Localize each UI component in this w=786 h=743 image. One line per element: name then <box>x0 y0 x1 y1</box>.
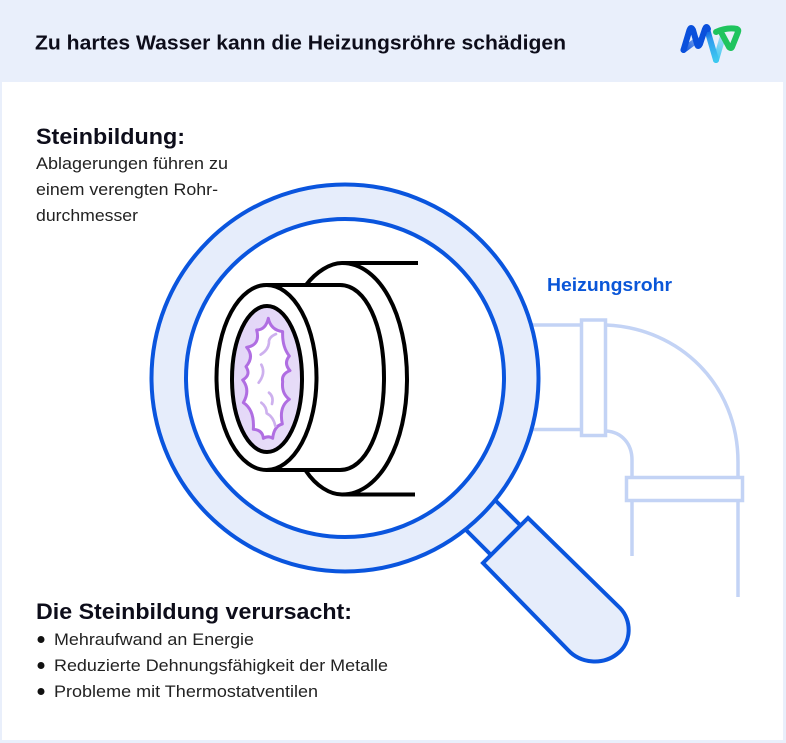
bullet list: Mehraufwand an Energie <box>54 630 254 649</box>
magnifier rim <box>152 184 538 572</box>
bullet list: Reduzierte Dehnungsfähigkeit der Metalle <box>54 656 388 675</box>
heading: Die Steinbildung verursacht: Die Steinbildung verursacht: <box>36 599 352 624</box>
heating pipe illustration <box>525 320 742 597</box>
magnifier neck <box>460 495 522 556</box>
text block: Steinbildung description: durchmesser <box>36 206 138 225</box>
text block: Steinbildung description: einem verengten Rohr- <box>36 180 218 199</box>
icon: logo <box>684 27 738 60</box>
pipe body <box>266 285 384 470</box>
magnifier lens <box>186 219 504 537</box>
bullet list: Probleme mit Thermostatventilen <box>54 682 318 701</box>
title: Zu hartes Wasser kann die Heizungsröhre schädigen <box>35 32 566 54</box>
scale outline <box>243 318 290 438</box>
limescale deposits <box>243 318 290 438</box>
bullet list <box>38 630 388 701</box>
pipe opening <box>232 306 302 452</box>
pipe front ring <box>216 285 316 470</box>
magnifying glass <box>152 184 629 661</box>
text block: Steinbildung description <box>36 154 228 225</box>
text block: Steinbildung description: Ablagerungen führen zu <box>36 154 228 173</box>
label: Heizungsrohr: Heizungsrohr <box>547 275 672 295</box>
pipe flange <box>306 263 418 494</box>
magnifier handle <box>483 518 629 661</box>
heading: Steinbildung: Steinbildung: <box>36 124 185 149</box>
pipe cross-section <box>216 263 418 494</box>
scale flecks <box>259 334 276 426</box>
